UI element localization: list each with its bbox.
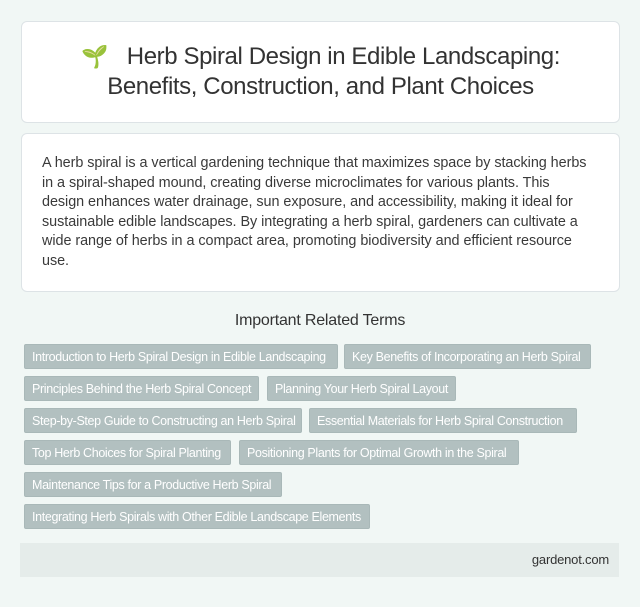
title: 🌱 Herb Spiral Design in Edible Landscaping: (81, 43, 560, 70)
tag 5: Step-by-Step Guide to Constructing an Herb Spiral (32, 414, 296, 428)
tag 6: Essential Materials for Herb Spiral Construction (317, 414, 563, 428)
description text: sustainable edible landscapes. By integrating a herb spiral, gardeners can cultivate a (42, 214, 578, 230)
tag 10 (24, 504, 370, 529)
description text: in a spiral-shaped mound, creating diverse microclimates for various plants. This (42, 174, 550, 190)
footer source text: gardenot.com (532, 552, 609, 567)
tag 9: Maintenance Tips for a Productive Herb Spiral (32, 478, 271, 492)
title (81, 43, 560, 100)
tag 2: Key Benefits of Incorporating an Herb Spiral (352, 350, 580, 364)
tag 9 (24, 472, 282, 497)
description text (42, 155, 586, 268)
tag 5 (24, 408, 302, 433)
title: Benefits, Construction, and Plant Choices (107, 73, 534, 100)
tag 8: Positioning Plants for Optimal Growth in the Spiral (247, 446, 506, 460)
tag 3: Principles Behind the Herb Spiral Concept (32, 382, 251, 396)
tag 6 (309, 408, 577, 433)
title card (21, 21, 620, 123)
tag 3 (24, 376, 259, 401)
description text: design enhances water drainage, sun exposure, and accessibility, making it ideal for (42, 194, 573, 210)
tag 10: Integrating Herb Spirals with Other Edible Landscape Elements (32, 510, 361, 524)
tag 4: Planning Your Herb Spiral Layout (275, 382, 448, 396)
tag 4 (267, 376, 456, 401)
tag 1: Introduction to Herb Spiral Design in Edible Landscaping (32, 350, 326, 364)
tag 7: Top Herb Choices for Spiral Planting (32, 446, 221, 460)
footer (20, 543, 619, 577)
tag 1 (24, 344, 338, 369)
description text: use. (42, 252, 69, 268)
tag 7 (24, 440, 231, 465)
heading: related terms: Important Related Terms (235, 312, 405, 329)
description text: A herb spiral is a vertical gardening technique that maximizes space by stacking herbs (42, 155, 586, 171)
description card (21, 133, 620, 292)
tag 2 (344, 344, 591, 369)
tag 8 (239, 440, 519, 465)
description text: wide range of herbs in a compact area, promoting biodiversity and efficient resource (42, 233, 572, 249)
